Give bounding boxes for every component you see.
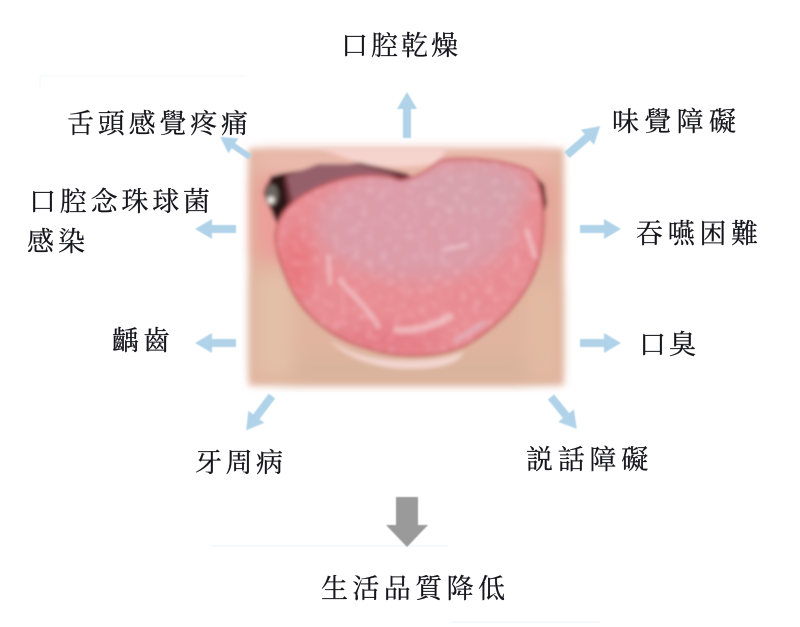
label: taste disorder: 味覺障礙 [612, 107, 741, 137]
arrow: upper left to tongue pain [215, 129, 255, 164]
label: periodontal disease: 牙周病 [195, 448, 286, 478]
arrow: lower right to speech disorder [543, 391, 585, 435]
arrow: left to oral candidiasis [195, 219, 236, 239]
arrow: right to bad breath [580, 333, 621, 353]
right mouth corner [533, 173, 547, 218]
pale coated centre [317, 167, 517, 280]
lower lip highlight [330, 340, 463, 369]
arrow: upper right to taste disorder [560, 119, 607, 163]
tongue surface [270, 157, 547, 360]
label: speech disorder: 説話障礙 [526, 445, 653, 475]
white streak highlights [328, 230, 535, 340]
faint scan line below gray arrow [210, 546, 600, 622]
label: dry mouth: 口腔乾燥 [341, 31, 461, 61]
red tongue tip [340, 326, 438, 352]
label: caries: 齲齒 [112, 326, 174, 356]
dark corner shadows [270, 173, 288, 227]
label: reduced quality of life: 生活品質降低 [321, 574, 509, 604]
label: oral candidiasis [27, 187, 214, 257]
arrow: gray down to reduced quality of life [386, 497, 428, 547]
arrow: lower left to periodontal disease [238, 390, 280, 436]
speckled coating [282, 162, 539, 352]
tongue shadow rim [277, 160, 542, 354]
label: swallowing difficulty: 吞嚥困難 [636, 219, 763, 249]
upper lip and reddened mouth edge [257, 153, 557, 380]
label: oral candidiasis: 口腔念珠球菌 [29, 187, 214, 217]
silver molar [265, 184, 278, 206]
photo skin background [249, 149, 564, 385]
arrow: left to caries [195, 333, 236, 353]
centre of upper lip [320, 149, 447, 167]
arrow: up to dry mouth [397, 92, 417, 138]
label: bad breath: 口臭 [639, 330, 699, 360]
label: tongue pain: 舌頭感覺疼痛 [67, 109, 252, 139]
dark mouth interior [263, 163, 423, 227]
palate [287, 164, 397, 205]
label: oral candidiasis: 感染 [27, 227, 89, 257]
tongue photograph [249, 149, 564, 385]
arrow: right to swallowing difficulty [580, 219, 621, 239]
faint scan line top left [40, 76, 245, 88]
